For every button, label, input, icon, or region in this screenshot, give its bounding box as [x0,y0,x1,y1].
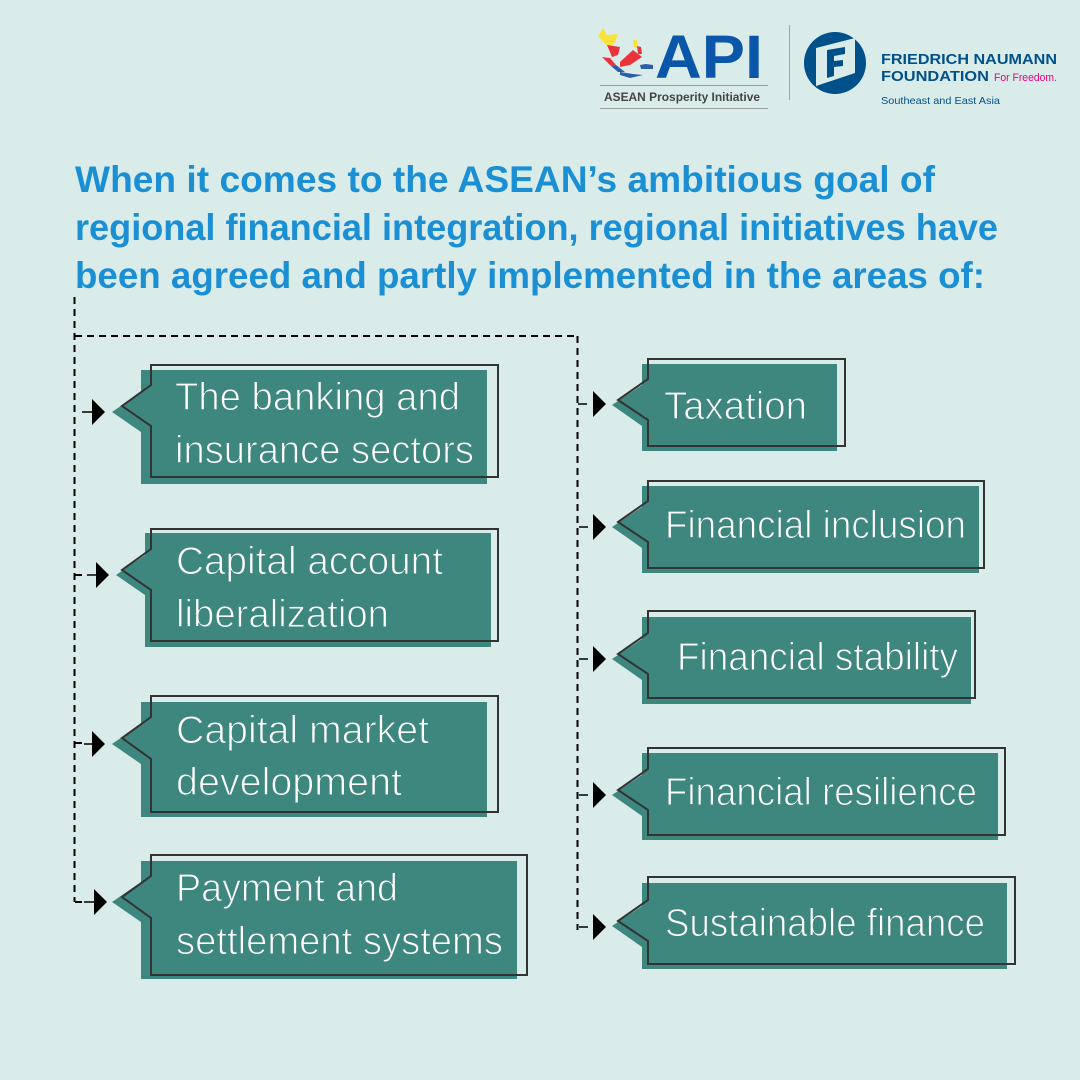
callout outline [618,748,1005,835]
label [175,376,474,472]
arrow [84,889,107,915]
label: development [176,761,402,804]
callout outline [618,359,845,446]
dashed connector tree [74,297,578,930]
arrow [84,731,105,757]
label: Financial resilience [665,771,977,814]
title [75,159,998,296]
label: Sustainable finance [665,902,985,945]
callout shadow [112,702,487,817]
label: The banking and [175,376,460,419]
callout shadow [112,370,487,484]
panel: financial inclusion [579,481,984,573]
panel: sustainable finance [579,877,1015,969]
callout outline [122,365,498,477]
logo wordmark: API: API [655,23,763,91]
label: insurance sectors [175,429,474,472]
callout shadow [612,486,979,573]
label: Capital market [176,709,429,752]
label: Financial stability [677,636,958,679]
label: Payment and [176,867,398,910]
title: been agreed and partly implemented in the areas of: [75,255,985,296]
arrow [87,562,109,588]
callout outline [122,696,498,812]
panel: banking and insurance [82,365,498,484]
arrow [82,399,105,425]
panel: taxation [578,359,845,451]
label: Financial inclusion [665,504,966,547]
callout shadow [612,364,837,451]
logo: Friedrich Naumann Foundation: Southeast and East Asia [881,95,1000,107]
panel: financial resilience [579,748,1005,840]
logo: Friedrich Naumann Foundation: FOUNDATION [881,69,989,85]
panel: capital account [87,529,498,647]
label: Taxation [664,385,807,428]
callout outline [618,611,975,698]
arrow [578,391,606,417]
label: settlement systems [176,920,503,963]
label [176,540,443,636]
label: Capital account [176,540,443,583]
title: regional financial integration, regional initiatives have [75,207,998,248]
icon: ASEAN map [598,28,653,78]
callout outline [618,481,984,568]
logo tagline: ASEAN Prosperity Initiative [604,92,760,104]
title: When it comes to the ASEAN’s ambitious goal of [75,159,936,200]
callout shadow [612,883,1007,969]
logo name: FRIEDRICH NAUMANN [881,52,1057,68]
label [176,867,503,963]
panel: capital market [84,696,498,817]
label: liberalization [176,593,389,636]
callout shadow [612,753,998,840]
callout shadow [112,861,517,979]
callout outline [122,529,498,641]
logo: Friedrich Naumann Foundation [804,32,1057,107]
arrow [579,782,606,808]
icon: F circle [804,32,866,94]
logo: Friedrich Naumann Foundation: For Freedom. [994,72,1057,84]
callout shadow [116,533,491,647]
label [176,709,429,804]
arrow [579,514,606,540]
callout shadow [612,617,971,704]
arrow [579,914,606,940]
logo: ASEAN Prosperity Initiative [598,23,768,109]
panel: financial stability [579,611,975,704]
callout outline [618,877,1015,964]
callout outline [122,855,527,975]
panel: payment and settlement [84,855,527,979]
arrow [579,646,606,672]
